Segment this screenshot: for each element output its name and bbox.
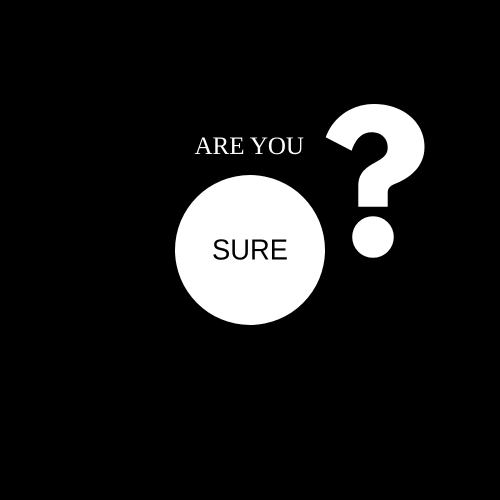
icon: question mark bbox=[326, 104, 424, 258]
circle with SURE label: SURE bbox=[212, 234, 288, 266]
circle with SURE label bbox=[175, 175, 325, 325]
heading: ARE YOU: ARE YOU bbox=[194, 133, 304, 160]
